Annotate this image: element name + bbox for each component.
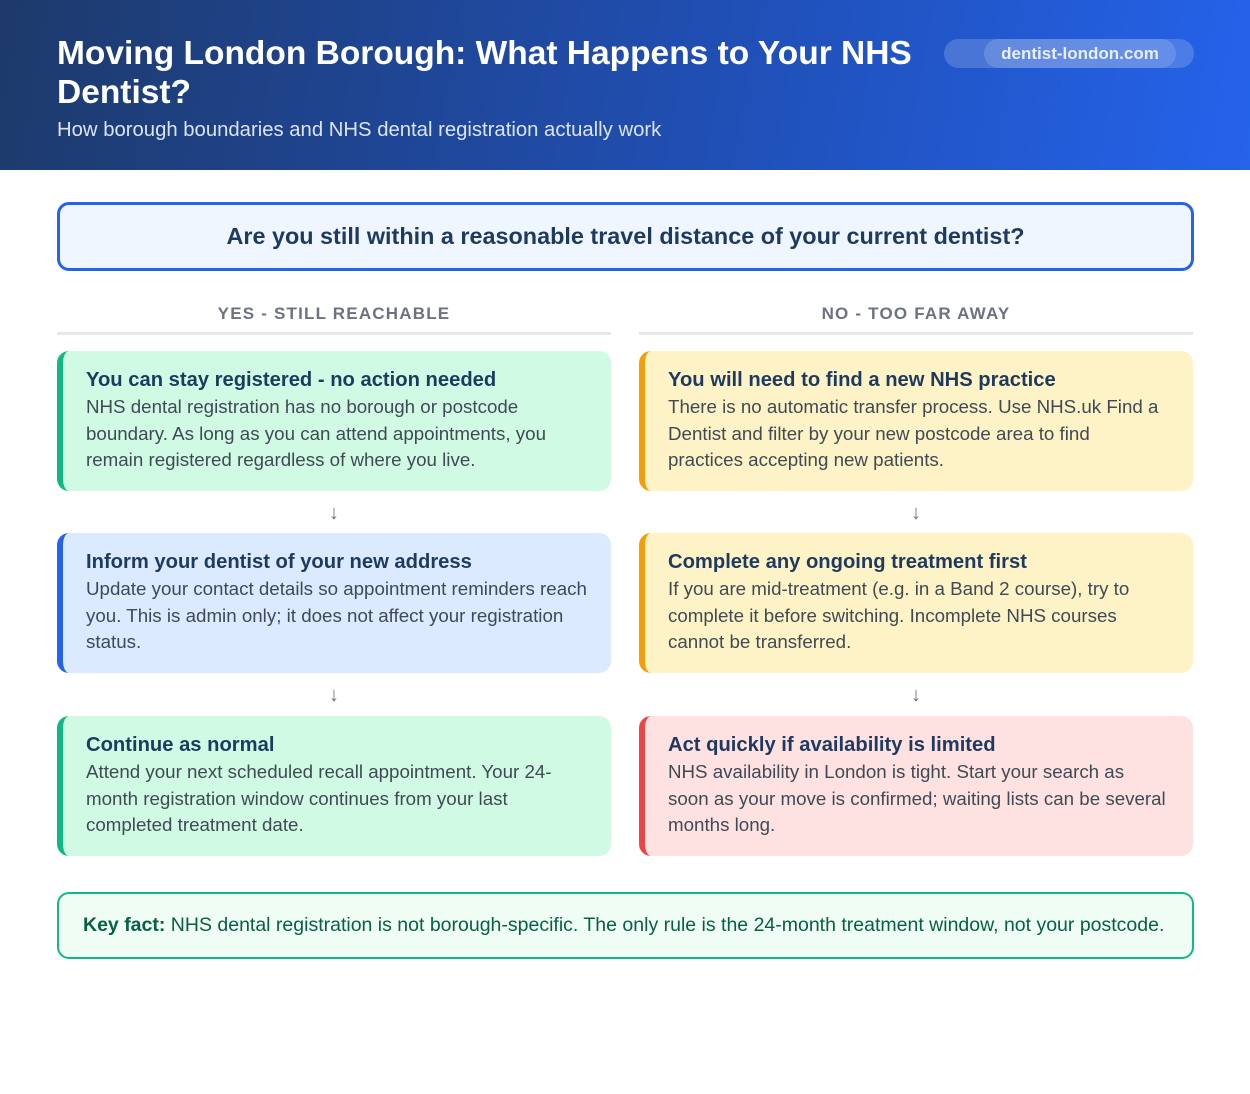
card: continue: Continue as normal	[86, 734, 274, 756]
column heading: yes	[57, 304, 611, 335]
card: inform dentist	[57, 533, 611, 673]
card: find new practice: practices accepting new patients.	[668, 449, 944, 470]
card: inform dentist: Inform your dentist of your new address	[86, 551, 472, 573]
arrow: ↓	[911, 684, 921, 706]
header	[0, 0, 1250, 170]
column heading: no	[639, 304, 1193, 335]
card: stay registered: You can stay registered - no action needed	[86, 369, 496, 391]
card: find new practice	[639, 351, 1193, 491]
card: act quickly: Act quickly if availability is limited	[668, 734, 996, 756]
card: complete treatment: Complete any ongoing treatment first	[668, 551, 1027, 573]
site pill: dentist-london.com	[1001, 44, 1159, 63]
arrow: ↓	[329, 684, 339, 706]
site pill	[944, 39, 1194, 68]
column heading: no: NO - TOO FAR AWAY	[822, 304, 1010, 323]
card: stay registered: NHS dental registration has no borough or postcode boundary. As long as you can attend appointments, you remain registered regardless of where you live.	[86, 396, 546, 470]
arrow: ↓	[329, 502, 339, 524]
card: complete treatment	[639, 533, 1193, 673]
card: stay registered	[57, 351, 611, 491]
subtitle: How borough boundaries and NHS dental registration actually work	[57, 119, 661, 141]
card: continue: Attend your next scheduled recall appointment. Your 24-month registration window continues from your last completed treatment date.	[86, 761, 552, 835]
question box	[57, 202, 1194, 271]
key fact: Key fact: NHS dental registration is not borough-specific. The only rule is the 24-month treatment window, not your postcode.	[83, 914, 1164, 936]
card: act quickly	[639, 716, 1193, 856]
key fact	[57, 892, 1194, 959]
column heading: yes: YES - STILL REACHABLE	[218, 304, 450, 323]
card: continue	[57, 716, 611, 856]
card: act quickly: soon as your move is confirmed; waiting lists can be several months long.	[668, 788, 1166, 835]
card: complete treatment: If you are mid-treatment (e.g. in a Band 2 course), try to complete it before switching. Incomplete NHS courses cannot be transferred.	[668, 578, 1129, 652]
card: inform dentist: Update your contact details so appointment reminders reach	[86, 578, 587, 599]
card: inform dentist: you. This is admin only; it does not affect your registration status.	[86, 604, 563, 652]
arrow: ↓	[911, 502, 921, 524]
card: act quickly: NHS availability in London is tight. Start your search as	[668, 761, 1124, 782]
title: Moving London Borough: What Happens to Your NHS Dentist?	[57, 35, 912, 111]
card: find new practice: There is no automatic transfer process. Use NHS.uk Find a Dentist and filter by your new postcode area to find	[668, 396, 1158, 444]
question box: Are you still within a reasonable travel distance of your current dentist?	[226, 223, 1025, 249]
card: find new practice: You will need to find a new NHS practice	[668, 369, 1056, 391]
